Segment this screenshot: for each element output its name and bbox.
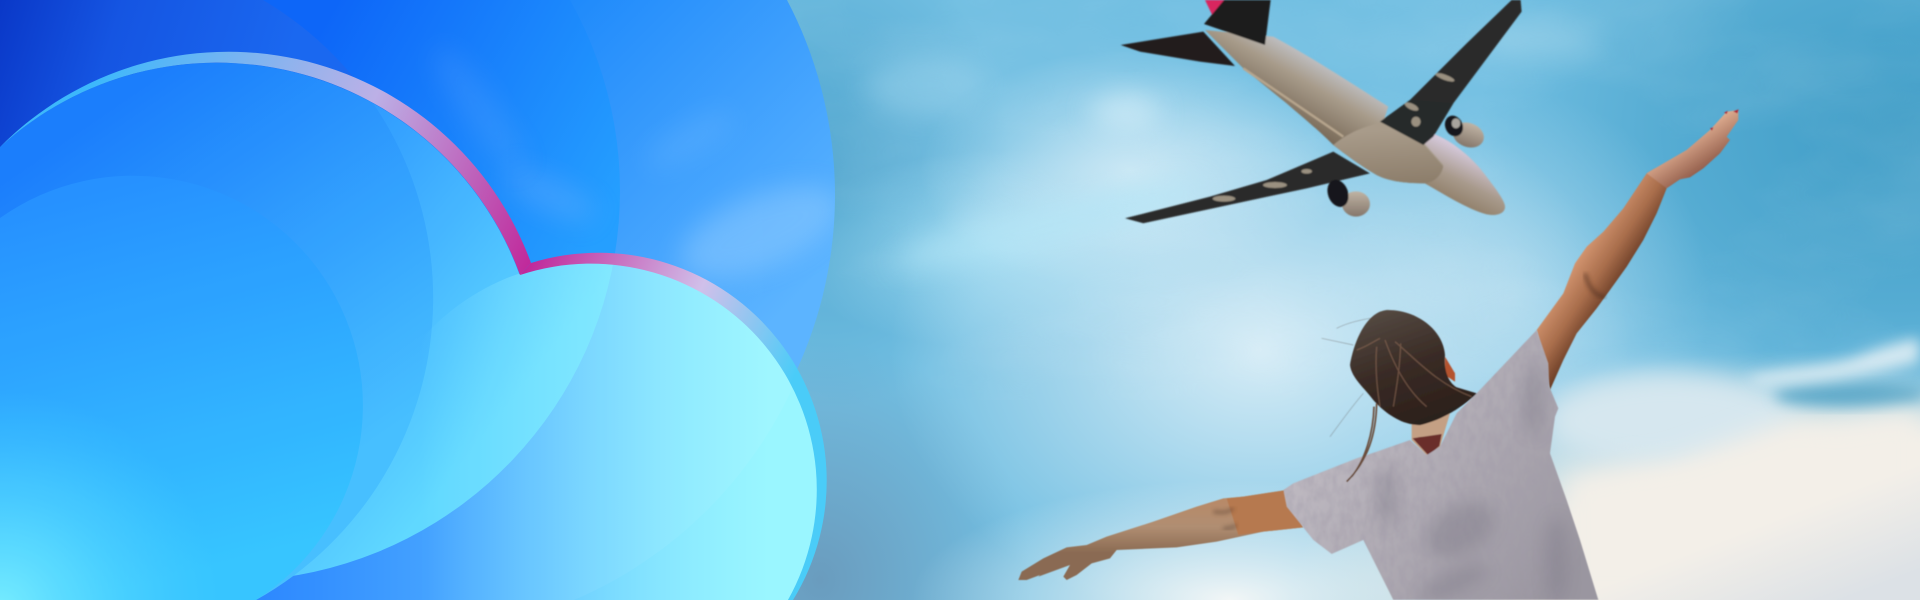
hand: [1647, 110, 1738, 188]
far wing: [1380, 0, 1522, 145]
wing root: [1380, 100, 1453, 145]
outer blue circle: [570, 0, 835, 369]
cloud outline: left lobe: [0, 52, 531, 275]
ear: [1445, 357, 1455, 382]
middle blue circle: [263, 0, 620, 274]
nails: [1710, 109, 1739, 131]
tail fin: [1204, 0, 1271, 45]
extended arm: [1018, 490, 1303, 580]
far engine: [1442, 113, 1487, 152]
elbow crease: [1585, 273, 1605, 297]
fuselage: [1205, 30, 1505, 215]
raised arm: [1537, 109, 1739, 390]
near wing: [1125, 152, 1370, 223]
torso and head: [1283, 310, 1598, 600]
left tailplane: [1121, 32, 1235, 66]
woman with arms outstretched: [1018, 109, 1739, 600]
cloud bank at lower right: [1545, 338, 1920, 600]
t-shirt: [1283, 330, 1598, 600]
cloud body: [0, 63, 817, 600]
cloud graphic: [0, 0, 900, 600]
elbow crease: [1213, 508, 1237, 528]
near engine: [1324, 177, 1370, 217]
fuselage stripe: [1243, 68, 1343, 137]
upper arm tone: [1227, 490, 1303, 535]
neck: [1412, 413, 1450, 455]
inner dark circle: [0, 0, 433, 600]
hair: [1322, 310, 1477, 482]
wing flaps: [1213, 71, 1455, 202]
cloud outline: right lobe: [520, 253, 827, 600]
necklace tattoo: [1413, 434, 1442, 455]
far wing marks: [1404, 101, 1421, 127]
belly: [1333, 122, 1443, 183]
airplane: [1121, 0, 1522, 223]
sky wisps: [640, 0, 1920, 400]
nose: [1425, 134, 1505, 215]
tail tip: [1205, 0, 1224, 17]
